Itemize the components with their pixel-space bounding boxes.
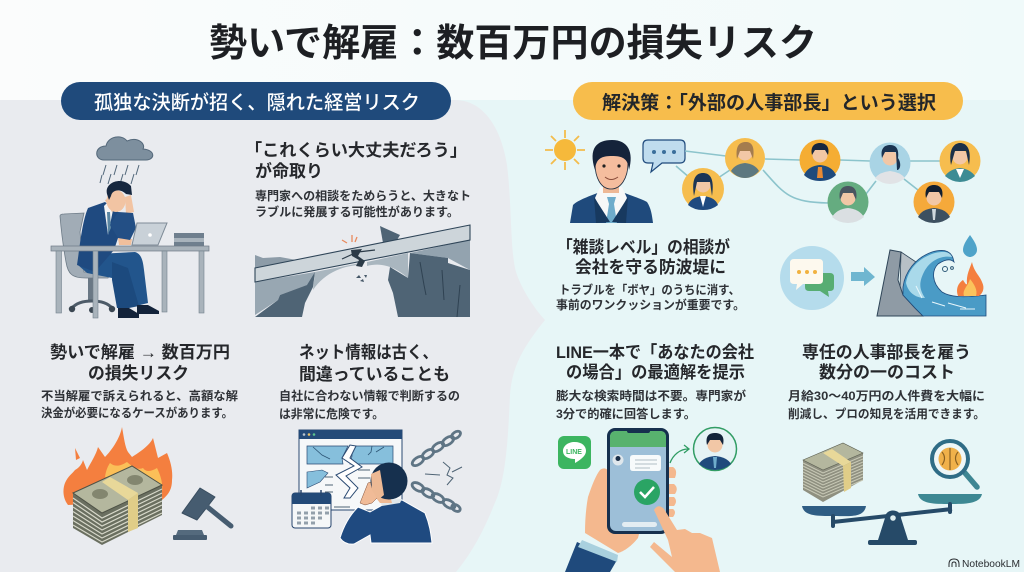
icon: balance scale with money and magnified brain xyxy=(802,441,982,545)
text block: 防波堤: 「雑談レベル」の相談が xyxy=(557,237,730,257)
text block: 勢いで解雇: 勢いで解雇 → 数百万円 xyxy=(50,343,230,362)
text block: 専任: 削減し、プロの知見を活用できます。 xyxy=(788,406,985,421)
icon: cracking bridge over cliffs xyxy=(255,225,470,317)
heading: right section pill: 解決策：「外部の人事部長」という選択 xyxy=(602,92,936,114)
icon: expert in green circle xyxy=(670,428,736,470)
icon: avatar 7 xyxy=(914,182,954,223)
text block: 専任 xyxy=(788,343,985,421)
text block: 防波堤 xyxy=(556,237,745,312)
text block: LINE: LINE一本で「あなたの会社 xyxy=(556,343,754,362)
text block: 命取り: 「これくらい大丈夫だろう」 xyxy=(245,141,467,160)
icon: avatar 4 xyxy=(870,142,910,184)
text block: ネット情報: 自社に合わない情報で判断するの xyxy=(279,388,460,403)
icon: worried man at desk under rain cloud xyxy=(51,137,209,318)
logo: NotebookLM: NotebookLM xyxy=(962,558,1020,570)
text block: 防波堤: トラブルを「ボヤ」のうちに消す、 xyxy=(559,282,740,297)
icon: consultant bust xyxy=(570,140,653,223)
text block: 命取り: 専門家への相談をためらうと、大きなト xyxy=(255,188,471,203)
panel: left risk background xyxy=(0,100,545,572)
heading: left section pill: 孤独な決断が招く、隠れた経営リスク xyxy=(94,92,420,114)
text block: LINE: の場合」の最適解を提示 xyxy=(566,363,745,382)
icon: avatar 3 xyxy=(800,140,840,181)
icon: seawall, wave and small fire xyxy=(877,235,986,316)
text block: 専任: 月給30〜40万円の人件費を大幅に xyxy=(788,388,985,403)
text block: 命取り: が命取り xyxy=(255,161,323,181)
icon: gavel xyxy=(173,488,231,540)
title: 勢いで解雇：数百万円の損失リスク xyxy=(209,23,817,65)
network lines xyxy=(676,151,940,203)
text block: 防波堤: 会社を守る防波堤に xyxy=(575,257,726,277)
icon: LINE logo xyxy=(558,436,591,469)
text block: 専任: 専任の人事部長を雇う xyxy=(802,343,971,362)
icon: chat bubble xyxy=(643,140,685,172)
icon: avatar 1 xyxy=(725,138,765,178)
text block: LINE: 3分で的確に回答します。 xyxy=(556,406,696,421)
icon: chat circle xyxy=(780,246,844,310)
icon: sun xyxy=(545,130,585,170)
icon: burning money stack xyxy=(63,427,172,545)
text block: 勢いで解雇: の損失リスク xyxy=(88,364,189,383)
text block: ネット情報: は非常に危険です。 xyxy=(279,406,384,421)
text block: ネット情報: 間違っていることも xyxy=(299,364,450,384)
text block: 勢いで解雇: 不当解雇で訴えられると、高額な解 xyxy=(41,388,238,403)
heading: right section pill xyxy=(573,82,963,120)
text block: 勢いで解雇: 決金が必要になるケースがあります。 xyxy=(41,405,233,420)
icon: avatar 6 xyxy=(828,182,868,223)
icon: hand holding phone xyxy=(565,428,720,572)
icon: avatar 5 xyxy=(940,140,980,182)
text block: 勢いで解雇 xyxy=(41,343,238,420)
text block: ネット情報: ネット情報は古く、 xyxy=(299,343,438,362)
text block: 命取り: ラブルに発展する可能性があります。 xyxy=(255,204,459,219)
icon: avatar 2 xyxy=(682,168,724,210)
panel: right solution background xyxy=(440,100,1024,572)
arrow xyxy=(851,267,875,286)
text block: LINE xyxy=(556,343,754,421)
text block: 命取り xyxy=(245,141,471,219)
text block: 防波堤: 事前のワンクッションが重要です。 xyxy=(556,297,745,312)
text block: 専任: 数分の一のコスト xyxy=(819,363,955,382)
heading: left section pill xyxy=(61,82,451,120)
icon: LINE logo: LINE xyxy=(566,449,582,456)
text block: LINE: 膨大な検索時間は不要。専門家が xyxy=(556,388,746,403)
text block: ネット情報 xyxy=(279,343,460,421)
icon: broken web page, calendar and worried man xyxy=(292,430,462,544)
